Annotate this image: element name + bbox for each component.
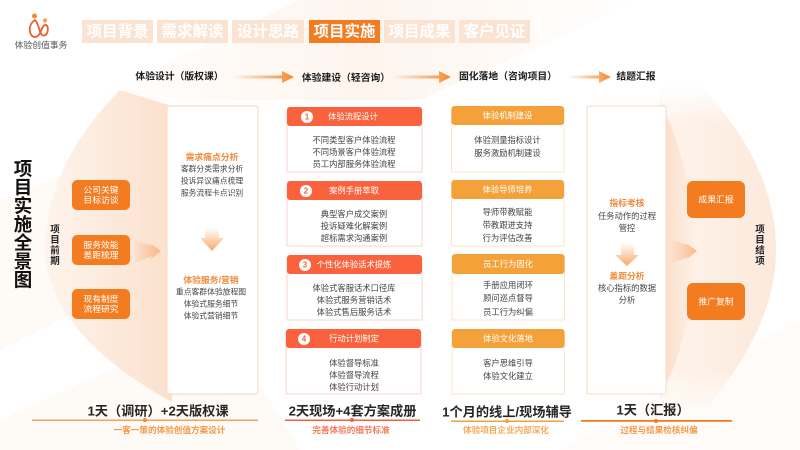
card 1: 员工内部服务体验流程 [313, 159, 395, 169]
label: 项目前期: 前 [50, 244, 60, 256]
pre-project boxes [72, 180, 130, 319]
panel: 体验设计: 重点客群体验旅程图 [176, 286, 246, 296]
card 2: 2 [304, 186, 309, 196]
footer: 体验设计: 一客一策的体验创值方案设计 [114, 424, 226, 435]
vertical title: 施 [14, 214, 33, 235]
card 2: 行为评估改善 [483, 233, 532, 243]
column: 体验建设 cards [286, 107, 422, 394]
tab: 项目成果 [384, 20, 455, 43]
vertical title: 全 [14, 232, 33, 254]
label: 项目结项: 目 [755, 235, 765, 246]
card 4: 4 [302, 334, 307, 344]
arrow [568, 71, 611, 83]
heading: 体验建设: 体验建设（轻咨询） [302, 71, 390, 84]
card 3: 顾问巡点督导 [483, 293, 533, 303]
vertical title: 目 [14, 177, 32, 198]
left arc backdrop [45, 90, 172, 402]
panel: 体验设计: 客群分类需求分析 [181, 164, 243, 174]
panel: 结题汇报 [587, 106, 666, 394]
logo: 体验创值事务 [15, 39, 68, 50]
footer: 体验建设: 2天现场+4套方案成册 [289, 402, 416, 418]
panel: 体验设计: 体验式服务细节 [184, 298, 238, 308]
card 3 [452, 254, 564, 320]
card 4: 体验文化落地 [483, 334, 533, 344]
vertical title [14, 158, 33, 290]
tab: 设计思路 [232, 20, 304, 43]
box: 现有制度流程研究: 现有制度 [83, 293, 119, 304]
arrow [232, 71, 294, 83]
card 1: 1 [305, 112, 310, 122]
vertical title: 实 [14, 196, 32, 216]
box: 推广复制: 推广复制 [698, 296, 734, 306]
card 3 [287, 255, 422, 320]
box: 服务效能差距梳理: 服务效能 [83, 239, 119, 250]
panel: 体验设计: 投诉异议痛点梳理 [181, 176, 243, 186]
label: 项目结项: 项 [755, 224, 765, 236]
card 4: 客户思维引导 [483, 358, 533, 368]
panel: 体验设计: 需求痛点分析 [186, 151, 239, 162]
footer: 结题汇报: 1天（汇报） [616, 402, 690, 418]
tab: 项目实施 active [309, 20, 380, 43]
heading: 结题汇报: 结题汇报 [616, 70, 656, 82]
right arc backdrop [660, 85, 776, 415]
card 4: 体验行动计划 [329, 382, 379, 392]
footer: 体验设计: 1天（调研）+2天版权课 [87, 402, 229, 418]
tab: 需求解读 [157, 20, 228, 43]
card 3: 员工行为纠偏 [483, 307, 533, 317]
tab: 项目背景: 项目背景 [86, 22, 149, 40]
arrow [392, 71, 451, 83]
footer: 结题汇报: 过程与结果检核纠偏 [620, 424, 698, 435]
card 2: 导师带教赋能 [483, 207, 532, 217]
label: 项目前期: 目 [50, 235, 60, 246]
navigation tabs [82, 20, 530, 43]
arrow: left peach [135, 240, 161, 263]
label: 项目结项: 项 [755, 256, 765, 267]
footer: 体验建设 [285, 402, 420, 435]
label: 项目前期: 项 [50, 224, 60, 236]
box: 公司关键目标访谈 [72, 180, 130, 210]
card 1: 不同场景客户体验流程 [313, 147, 395, 157]
card 3: 3 [303, 260, 308, 270]
panel: 结题汇报: 管控 [619, 223, 635, 233]
label: 项目前期 [50, 224, 60, 267]
card 1 [287, 107, 422, 172]
label: 项目结项 [755, 224, 765, 267]
card 4: 体验文化建立 [483, 371, 533, 381]
tab: 项目实施 active: 项目实施 [313, 22, 376, 40]
panel: 结题汇报: 分析 [619, 295, 635, 305]
card 2: 投诉疑难化解案例 [321, 221, 387, 231]
vertical title: 项 [14, 158, 33, 180]
heading: 体验设计: 体验设计（版权课） [135, 70, 224, 82]
box: 成果汇报: 成果汇报 [698, 194, 734, 204]
footer: 体验设计 [32, 402, 258, 435]
panel: 结题汇报: 差距分析 [609, 270, 645, 281]
card 2: 超标需求沟通案例 [321, 233, 387, 243]
column: 固化落地 cards [452, 106, 564, 394]
box: 公司关键目标访谈: 目标访谈 [83, 194, 119, 205]
card 4: 行动计划制定 [329, 334, 379, 344]
card 2 [452, 180, 564, 246]
card 3: 体验式服务营销话术 [317, 295, 391, 305]
card 3: 体验式客服话术口径库 [313, 283, 395, 293]
footer: 固化落地: 体验项目企业内部深化 [463, 424, 549, 435]
panel: 体验设计: 服务流程卡点识别 [181, 188, 243, 198]
box: 服务效能差距梳理 [72, 235, 130, 265]
card 4: 体验督导流程 [329, 370, 379, 380]
tab: 项目背景 [82, 20, 153, 43]
card 3: 手册应用闭环 [483, 280, 533, 290]
card 2: 带教跟进支持 [483, 220, 532, 230]
tab: 设计思路: 设计思路 [237, 22, 299, 40]
footer: 结题汇报 [581, 402, 732, 435]
panel: 体验设计: 体验服务/营销 [183, 274, 239, 285]
panel: 体验设计: 体验式营销细节 [184, 310, 238, 320]
card 1: 服务激励机制建设 [474, 148, 541, 158]
card 2: 典型客户成交案例 [321, 209, 387, 219]
label: 项目前期: 期 [50, 255, 60, 267]
card 4 [286, 329, 421, 394]
logo [15, 14, 68, 50]
footer: 固化落地 [442, 404, 572, 435]
card 4 [452, 329, 564, 394]
closing boxes [687, 181, 745, 320]
footer: 体验建设: 完善体验的细节标准 [312, 424, 390, 435]
card 4: 体验督导标准 [329, 358, 379, 368]
arrow: down [200, 228, 224, 251]
tab: 项目成果: 项目成果 [388, 22, 451, 40]
vertical title: 景 [14, 251, 32, 272]
panel: 结题汇报: 核心指标的数据 [598, 283, 656, 293]
arrow: down [615, 243, 639, 266]
card 3: 体验式售后服务话术 [317, 307, 391, 317]
box: 服务效能差距梳理: 差距梳理 [83, 249, 119, 260]
heading: 固化落地: 固化落地（咨询项目） [459, 70, 557, 82]
card 2: 体验导师培养 [483, 184, 532, 194]
tab: 客户见证 [459, 20, 530, 43]
vertical title: 图 [14, 270, 32, 290]
card 1: 体验测量指标设计 [474, 135, 541, 145]
card 3: 个性化体验话术提炼 [317, 260, 391, 270]
card 1 [452, 106, 564, 172]
card 1: 体验流程设计 [328, 112, 378, 122]
card 2: 案例手册萃取 [329, 186, 380, 196]
card 1: 体验机制建设 [483, 110, 532, 120]
panel: 体验设计 [167, 106, 258, 394]
panel: 结题汇报: 任务动作的过程 [598, 211, 656, 221]
label: 项目结项: 结 [755, 244, 765, 256]
box: 现有制度流程研究: 流程研究 [83, 303, 119, 314]
card 1: 不同类型客户体验流程 [313, 135, 395, 145]
footer: 固化落地: 1个月的线上/现场辅导 [442, 404, 572, 420]
card 3: 员工行为固化 [483, 259, 533, 269]
panel: 结题汇报: 指标考核 [609, 197, 645, 208]
tab: 客户见证: 客户见证 [463, 22, 526, 40]
tab: 需求解读: 需求解读 [161, 22, 224, 40]
box: 公司关键目标访谈: 公司关键 [83, 184, 119, 195]
phase headings and arrows [135, 70, 656, 84]
arrow: right peach [672, 240, 697, 263]
card 2 [287, 181, 422, 246]
box: 现有制度流程研究 [72, 289, 130, 319]
